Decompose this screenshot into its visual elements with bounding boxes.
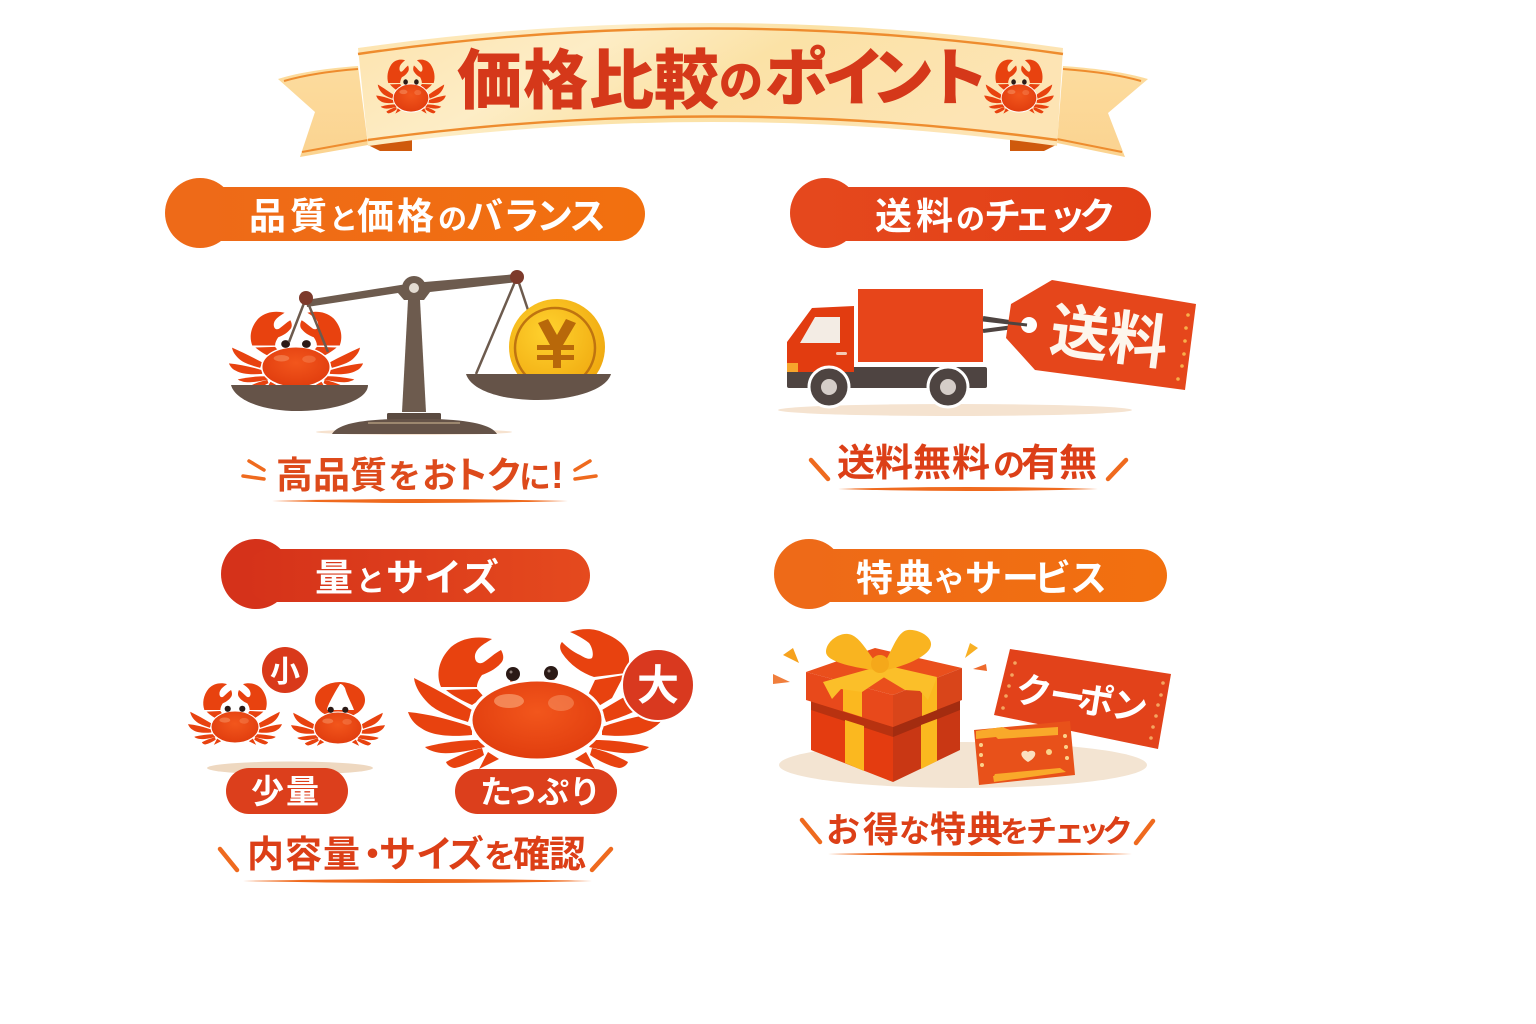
caption: 確認 (513, 834, 586, 875)
badge: small: 小 (270, 656, 300, 689)
heading pill: の (956, 204, 985, 236)
icon: small crabs (188, 647, 385, 774)
banner main ribbon (358, 23, 1063, 146)
title: の (719, 58, 763, 107)
caption: 有無 (1021, 443, 1097, 485)
caption (243, 455, 596, 503)
caption: を (1000, 817, 1029, 849)
banner right tail (1010, 66, 1148, 157)
caption: ! (551, 455, 564, 497)
caption: の (993, 447, 1025, 483)
icon: title crab left (376, 60, 446, 114)
label: little (226, 768, 348, 814)
panel: shipping (778, 178, 1196, 491)
caption: お (422, 457, 457, 496)
icon: coupon (994, 649, 1171, 749)
icon: small ticket (974, 721, 1075, 785)
caption: に (519, 459, 551, 495)
label: plenty (455, 769, 617, 814)
icon: truck (778, 289, 1132, 416)
heading pill: 品質 (249, 196, 327, 237)
title: ポイント (765, 44, 989, 114)
heading pill: 特典 (856, 558, 933, 599)
heading pill: バランス (466, 196, 606, 237)
caption: お (826, 812, 860, 850)
caption: を (484, 838, 516, 874)
small crab left (188, 683, 282, 745)
panel: benefits and services (773, 539, 1171, 856)
caption: な (899, 814, 930, 849)
heading pill (790, 178, 1151, 248)
caption: ・サイズ (354, 834, 484, 875)
heading pill: 価格 (357, 196, 434, 237)
panel: quality and price (165, 178, 645, 503)
icon: gift box (773, 630, 1147, 788)
heading pill: 送料 (875, 196, 953, 237)
caption: 送料無料 (837, 443, 990, 485)
label: plenty: たっぷり (480, 774, 601, 810)
caption (220, 834, 611, 883)
icon: balance scale (229, 270, 611, 435)
caption: 得 (863, 809, 899, 850)
crab on scale (229, 312, 363, 390)
caption: 高品質 (276, 455, 387, 496)
icon: shipping tag (983, 280, 1196, 390)
icon: shipping tag: 送料 (1046, 297, 1172, 377)
banner left tail (278, 66, 412, 157)
heading pill: サービス (965, 558, 1107, 599)
caption: トク (452, 455, 523, 496)
icon: coupon: クーポン (1013, 668, 1151, 730)
heading pill (774, 539, 1167, 609)
heading pill: と (329, 204, 358, 236)
heading pill: と (356, 566, 385, 598)
caption: 内容量 (247, 834, 360, 875)
caption (811, 443, 1126, 491)
small crab right (291, 682, 385, 746)
caption (802, 809, 1153, 856)
icon: large crab (408, 629, 666, 769)
badge: large: 大 (637, 662, 679, 709)
label: little: 少量 (251, 773, 319, 810)
coin (509, 299, 605, 395)
heading pill: サイズ (386, 557, 499, 600)
title banner (278, 23, 1148, 157)
heading pill: 量 (315, 558, 353, 600)
caption: 特典 (930, 809, 1003, 850)
panel: quantity and size (188, 539, 694, 883)
heading pill: チェック (984, 196, 1116, 237)
heading pill: や (935, 566, 963, 597)
heading pill (165, 178, 645, 248)
title: 価格比較 (457, 44, 719, 117)
caption: を (388, 458, 421, 495)
badge: small (262, 647, 308, 693)
heading pill (221, 539, 590, 609)
sparkles (773, 643, 987, 684)
badge: large (622, 649, 694, 721)
icon: title crab right (984, 60, 1054, 114)
caption: チェック (1026, 814, 1133, 849)
heading pill: の (438, 204, 467, 236)
